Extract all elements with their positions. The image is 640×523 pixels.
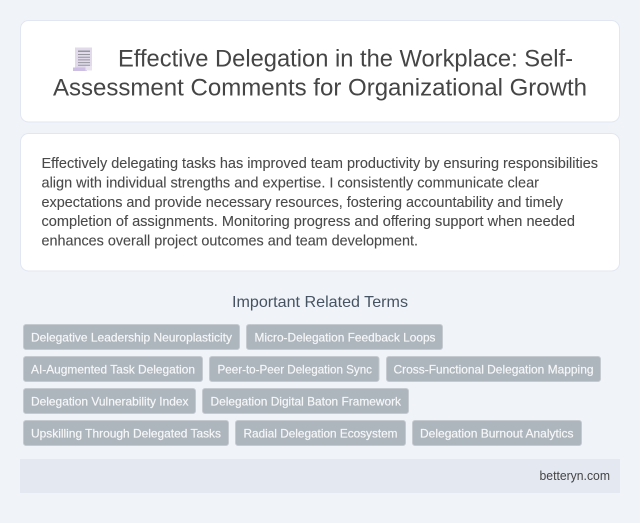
panel: header: [20, 20, 620, 122]
tag: [202, 388, 408, 414]
panel: related term tags: [24, 324, 600, 446]
footer source label: betteryn.com: [540, 468, 610, 483]
tag: [386, 356, 600, 382]
tag: Micro-Delegation Feedback Loops: [254, 330, 436, 344]
tag: Upskilling Through Delegated Tasks: [31, 426, 221, 440]
tag: Cross-Functional Delegation Mapping: [394, 362, 594, 376]
tag: Delegation Burnout Analytics: [420, 426, 574, 440]
body paragraph: align with individual strengths and expertise. I consistently communicate clear: [42, 175, 539, 191]
tag: [210, 356, 379, 382]
footer: [20, 459, 620, 493]
tag: [246, 324, 442, 350]
tag: AI-Augmented Task Delegation: [31, 362, 195, 376]
body paragraph: completion of assignments. Monitoring progress and offering support when needed: [42, 214, 575, 230]
tag: [24, 356, 202, 382]
heading: related terms: Important Related Terms: [232, 294, 408, 311]
tag: Radial Delegation Ecosystem: [244, 426, 398, 440]
tag: [24, 420, 228, 446]
tag: [236, 420, 406, 446]
tag: Peer-to-Peer Delegation Sync: [218, 362, 372, 376]
tag: [412, 420, 582, 446]
tag: [24, 388, 196, 414]
body paragraph: expectations and provide necessary resources, fostering accountability and timely: [42, 195, 564, 211]
tag: Delegation Digital Baton Framework: [210, 394, 402, 408]
body paragraph: [42, 156, 598, 250]
title: [53, 46, 587, 102]
icon: document scroll: [73, 48, 92, 71]
title: Assessment Comments for Organizational Growth: [53, 74, 587, 102]
body paragraph: Effectively delegating tasks has improved team productivity by ensuring responsibilities: [42, 156, 598, 172]
tag: Delegative Leadership Neuroplasticity: [31, 330, 232, 344]
title: Effective Delegation in the Workplace: Self-: [118, 46, 573, 72]
panel: self-assessment text: [20, 134, 620, 271]
body paragraph: enhances overall project outcomes and team development.: [42, 234, 418, 250]
tag: Delegation Vulnerability Index: [31, 394, 188, 408]
tag: [24, 324, 240, 350]
